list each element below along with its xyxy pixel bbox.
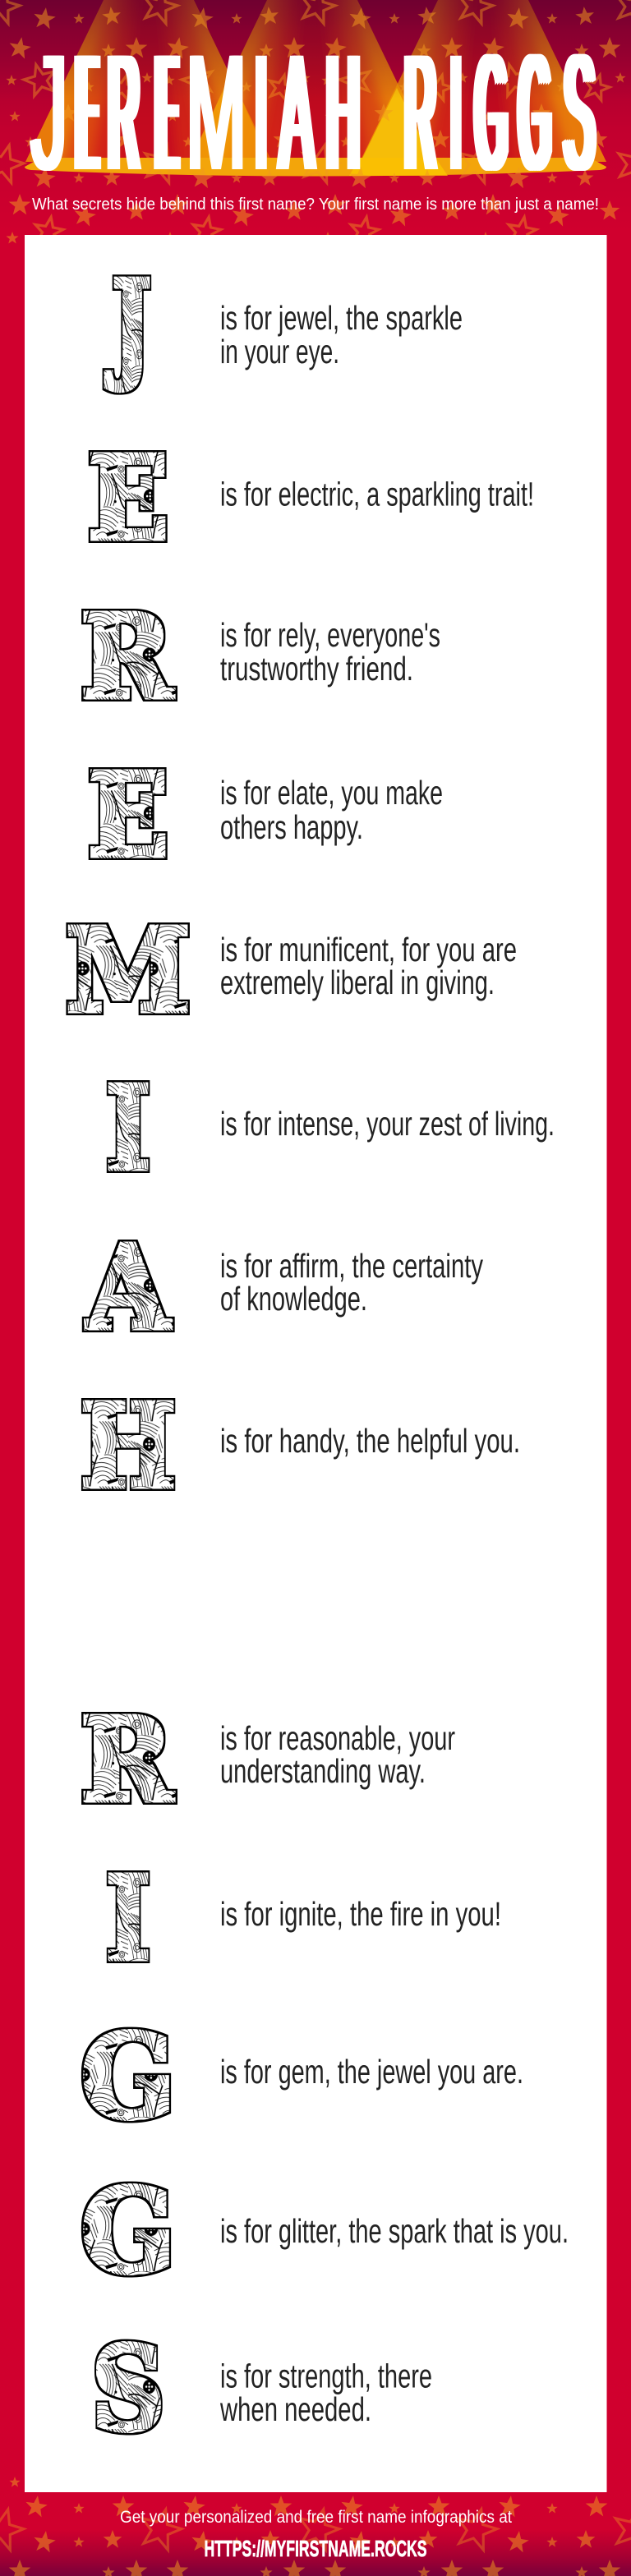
letter A: A: [85, 1220, 171, 1355]
letter S: S: [92, 2321, 164, 2457]
title: E: [157, 20, 177, 205]
row: R: [81, 590, 440, 724]
text: R meaning: is for rely, everyone's: [220, 616, 440, 654]
title: R: [108, 21, 139, 205]
title: R: [405, 21, 435, 205]
letter G: G: [81, 2009, 175, 2145]
subtitle: What secrets hide behind this first name? Your first name is more than just a name!: [32, 196, 599, 214]
text: J meaning: in your eye.: [220, 333, 339, 370]
letter I: I: [106, 1061, 150, 1196]
text: M meaning: extremely liberal in giving.: [220, 964, 495, 1001]
text: I meaning: is for ignite, the fire in you!: [220, 1895, 501, 1933]
text: S meaning: is for strength, there: [220, 2358, 432, 2395]
text: S meaning: when needed.: [219, 2390, 371, 2428]
text: J meaning: is for jewel, the sparkle: [220, 299, 463, 337]
row: A: [85, 1220, 483, 1355]
row: J: [105, 255, 463, 394]
row: M: [66, 903, 517, 1038]
text: E meaning: is for elate, you make: [220, 774, 443, 812]
star pattern bottom: [0, 2477, 631, 2576]
row: I: [106, 1852, 501, 1986]
title: G: [519, 21, 550, 205]
row: I: [106, 1061, 555, 1196]
letter E: E: [88, 748, 168, 883]
title: H: [326, 21, 360, 205]
row: R: [81, 1693, 455, 1828]
row: H: [81, 1379, 520, 1514]
title: S: [564, 21, 595, 205]
row: E: [88, 748, 443, 883]
text: R meaning: understanding way.: [220, 1752, 426, 1790]
text: R meaning: is for reasonable, your: [220, 1719, 455, 1757]
text: M meaning: is for munificent, for you are: [220, 931, 517, 968]
title: M: [187, 21, 246, 205]
letter M: M: [66, 903, 191, 1038]
letter G: G: [81, 2164, 175, 2299]
title: [30, 20, 595, 205]
footer url: HTTPS://MYFIRSTNAME.ROCKS: [204, 2536, 427, 2561]
text: R meaning: trustworthy friend.: [220, 650, 413, 688]
text: E meaning: others happy.: [220, 808, 363, 846]
row: E: [88, 430, 534, 566]
footer text: Get your personalized and free first name infographics at: [120, 2508, 512, 2527]
title: G: [476, 21, 507, 205]
letter I: I: [106, 1852, 150, 1986]
title: E: [77, 20, 97, 205]
letter R: R: [81, 1693, 173, 1828]
row: G: [81, 2164, 569, 2299]
text: A meaning: is for affirm, the certainty: [220, 1247, 483, 1285]
letter H: H: [81, 1379, 176, 1514]
text: H meaning: is for handy, the helpful you.: [220, 1422, 520, 1460]
letter E: E: [88, 430, 168, 566]
title: I: [439, 21, 473, 205]
title: J: [30, 20, 67, 205]
letter R: R: [81, 590, 173, 724]
title: I: [244, 21, 279, 205]
title: A: [280, 21, 313, 205]
row: G: [81, 2009, 523, 2145]
row: S: [92, 2321, 432, 2457]
star pattern top: [0, 0, 631, 246]
letter J: J: [105, 255, 151, 394]
text: A meaning: of knowledge.: [220, 1280, 367, 1318]
spotlights: [0, 0, 631, 181]
